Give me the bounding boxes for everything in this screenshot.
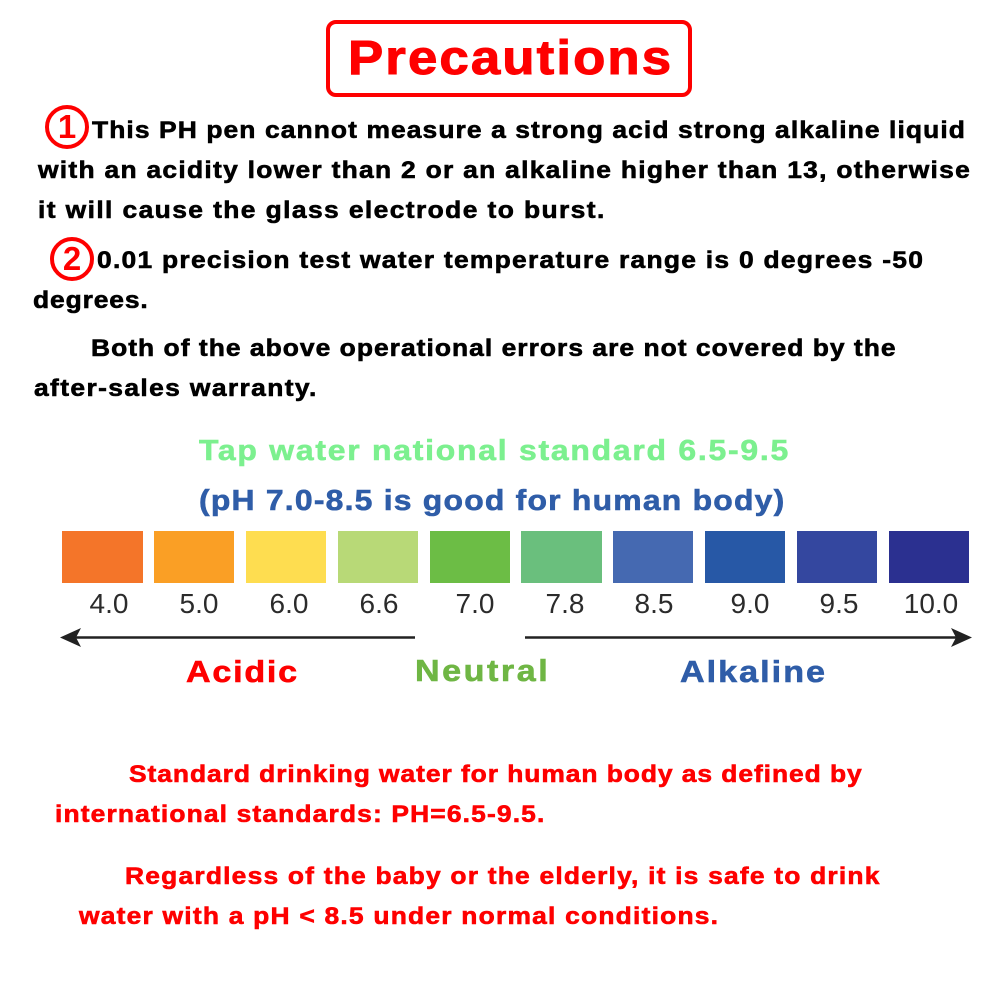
scale numbers: 7.8: [546, 588, 584, 619]
title: Precautions: Precautions: [348, 32, 673, 85]
swatch row: [62, 531, 969, 583]
scale numbers: 6.6: [360, 588, 398, 619]
arrow: alkaline direction: [525, 628, 972, 647]
icon: number 2: [50, 237, 94, 281]
title: Precautions: [326, 20, 692, 97]
arrows: [60, 628, 972, 647]
scale numbers: 9.5: [820, 588, 858, 619]
heading: good pH range: (pH 7.0-8.5 is good for human body): [199, 485, 785, 517]
text block: precaution 1: it will cause the glass electrode to burst.: [38, 197, 606, 224]
text block: precaution 1: This PH pen cannot measure a strong acid strong alkaline liquid: [92, 117, 966, 144]
scale numbers: 4.0: [90, 588, 128, 619]
text block: warranty note: Both of the above operational errors are not covered by the: [91, 335, 897, 362]
heading: tap water standard: Tap water national standard 6.5-9.5: [199, 435, 790, 467]
text block: drinking water standard: [55, 761, 863, 828]
label: Neutral: Neutral: [415, 653, 550, 688]
scale numbers: 10.0: [904, 588, 958, 619]
text block: safe drinking note: [78, 863, 881, 930]
icon: number 1: 1: [58, 108, 76, 145]
text block: precaution 1: [38, 117, 971, 224]
text block: precaution 1: with an acidity lower than 2 or an alkaline higher than 13, otherwise: [38, 157, 971, 184]
scale numbers: 9.0: [731, 588, 769, 619]
icon: number 2: 2: [63, 240, 81, 277]
scale numbers: 7.0: [456, 588, 494, 619]
chart: pH colour scale: [60, 531, 972, 689]
text block: safe drinking note: Regardless of the baby or the elderly, it is safe to drink: [125, 863, 881, 890]
label: Alkaline: Alkaline: [680, 654, 827, 689]
scale numbers: 8.5: [635, 588, 673, 619]
scale numbers: 6.0: [270, 588, 308, 619]
text block: precaution 2: [33, 247, 924, 314]
text block: warranty note: after-sales warranty.: [34, 375, 318, 402]
icon: number 1: [45, 105, 89, 149]
text block: drinking water standard: international standards: PH=6.5-9.5.: [55, 801, 545, 828]
label: Acidic: Acidic: [186, 654, 299, 689]
text block: warranty note: [34, 335, 897, 402]
scale numbers: [90, 588, 958, 619]
arrow: acidic direction: [60, 628, 415, 647]
text block: precaution 2: degrees.: [33, 287, 149, 314]
scale numbers: 5.0: [180, 588, 218, 619]
text block: drinking water standard: Standard drinking water for human body as defined by: [129, 761, 863, 788]
text block: precaution 2: 0.01 precision test water temperature range is 0 degrees -50: [97, 247, 924, 274]
text block: safe drinking note: water with a pH < 8.5 under normal conditions.: [79, 903, 719, 930]
